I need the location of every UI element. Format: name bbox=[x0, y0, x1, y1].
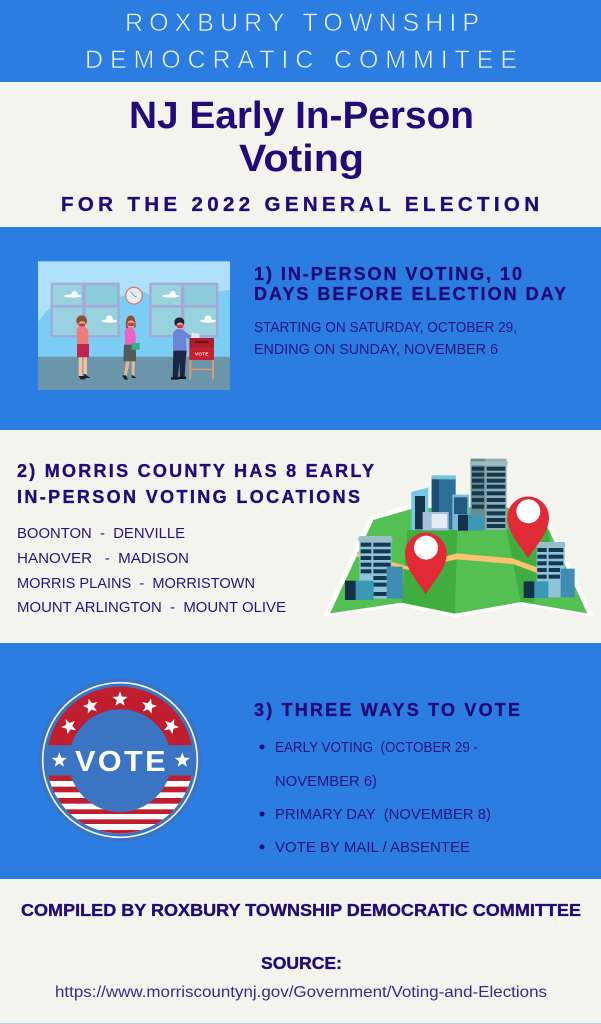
person 2 bbox=[122, 315, 140, 380]
step 2 heading: 2) MORRIS COUNTY HAS 8 EARLY bbox=[17, 461, 374, 481]
bullet list bbox=[260, 740, 491, 856]
panel: title bbox=[0, 82, 601, 227]
locations list: HANOVER - MADISON bbox=[17, 551, 189, 567]
panel: footer bbox=[0, 879, 601, 1024]
locations list: BOONTON - DENVILLE bbox=[17, 526, 185, 542]
step 1 text: STARTING ON SATURDAY, OCTOBER 29, bbox=[254, 320, 517, 336]
ballot box bbox=[189, 338, 214, 379]
panel: step 2 bbox=[0, 430, 601, 643]
locations list bbox=[17, 526, 286, 616]
map bbox=[323, 503, 594, 617]
buildings right bbox=[524, 542, 575, 598]
bullet list: EARLY VOTING (OCTOBER 29 - bbox=[275, 740, 478, 756]
step 3 heading: 3) THREE WAYS TO VOTE bbox=[254, 700, 520, 720]
step 2 heading bbox=[17, 461, 374, 507]
header text: DEMOCRATIC COMMITEE bbox=[85, 46, 517, 74]
illustration: people queueing to vote bbox=[38, 261, 230, 390]
step 1 text: ENDING ON SUNDAY, NOVEMBER 6 bbox=[254, 342, 498, 358]
person 1 bbox=[76, 315, 90, 379]
bullet list: PRIMARY DAY (NOVEMBER 8) bbox=[275, 807, 491, 823]
illustration: map with pins and buildings bbox=[323, 459, 594, 617]
ballot box: VOTE bbox=[195, 352, 209, 358]
panel: header bbox=[0, 0, 601, 82]
stars bbox=[52, 691, 190, 767]
person 3 bbox=[171, 317, 200, 380]
locations list: MORRIS PLAINS - MORRISTOWN bbox=[17, 576, 255, 592]
bullet list: VOTE BY MAIL / ABSENTEE bbox=[275, 840, 470, 856]
buildings back bbox=[411, 459, 508, 531]
subtitle: FOR THE 2022 GENERAL ELECTION bbox=[61, 193, 539, 216]
panel: step 3 bbox=[0, 643, 601, 879]
step 1 text bbox=[254, 320, 517, 358]
step 2 heading: IN-PERSON VOTING LOCATIONS bbox=[17, 487, 360, 507]
panel: step 1 bbox=[0, 227, 601, 430]
locations list: MOUNT ARLINGTON - MOUNT OLIVE bbox=[17, 600, 286, 616]
window right bbox=[149, 283, 218, 337]
badge label: VOTE bbox=[75, 746, 166, 778]
step 1 heading: 1) IN-PERSON VOTING, 10 bbox=[254, 264, 522, 284]
buildings left bbox=[345, 536, 403, 600]
step 1 heading: DAYS BEFORE ELECTION DAY bbox=[254, 284, 566, 304]
window left bbox=[51, 283, 120, 337]
title: NJ Early In-Person bbox=[129, 95, 474, 137]
map pin left bbox=[405, 532, 447, 595]
icon: vote badge bbox=[38, 678, 202, 842]
bullet list: NOVEMBER 6) bbox=[275, 774, 377, 790]
source label: SOURCE: bbox=[261, 953, 342, 973]
title bbox=[129, 95, 474, 180]
credit line: COMPILED BY ROXBURY TOWNSHIP DEMOCRATIC COMMITTEE bbox=[21, 900, 581, 920]
header text: ROXBURY TOWNSHIP bbox=[125, 9, 479, 37]
source url: https://www.morriscountynj.gov/Government/Voting-and-Elections bbox=[55, 984, 547, 1001]
title: Voting bbox=[239, 138, 364, 180]
map pin right bbox=[507, 496, 549, 559]
step 1 heading bbox=[254, 264, 566, 304]
wall clock bbox=[126, 287, 142, 304]
header text bbox=[85, 9, 517, 74]
